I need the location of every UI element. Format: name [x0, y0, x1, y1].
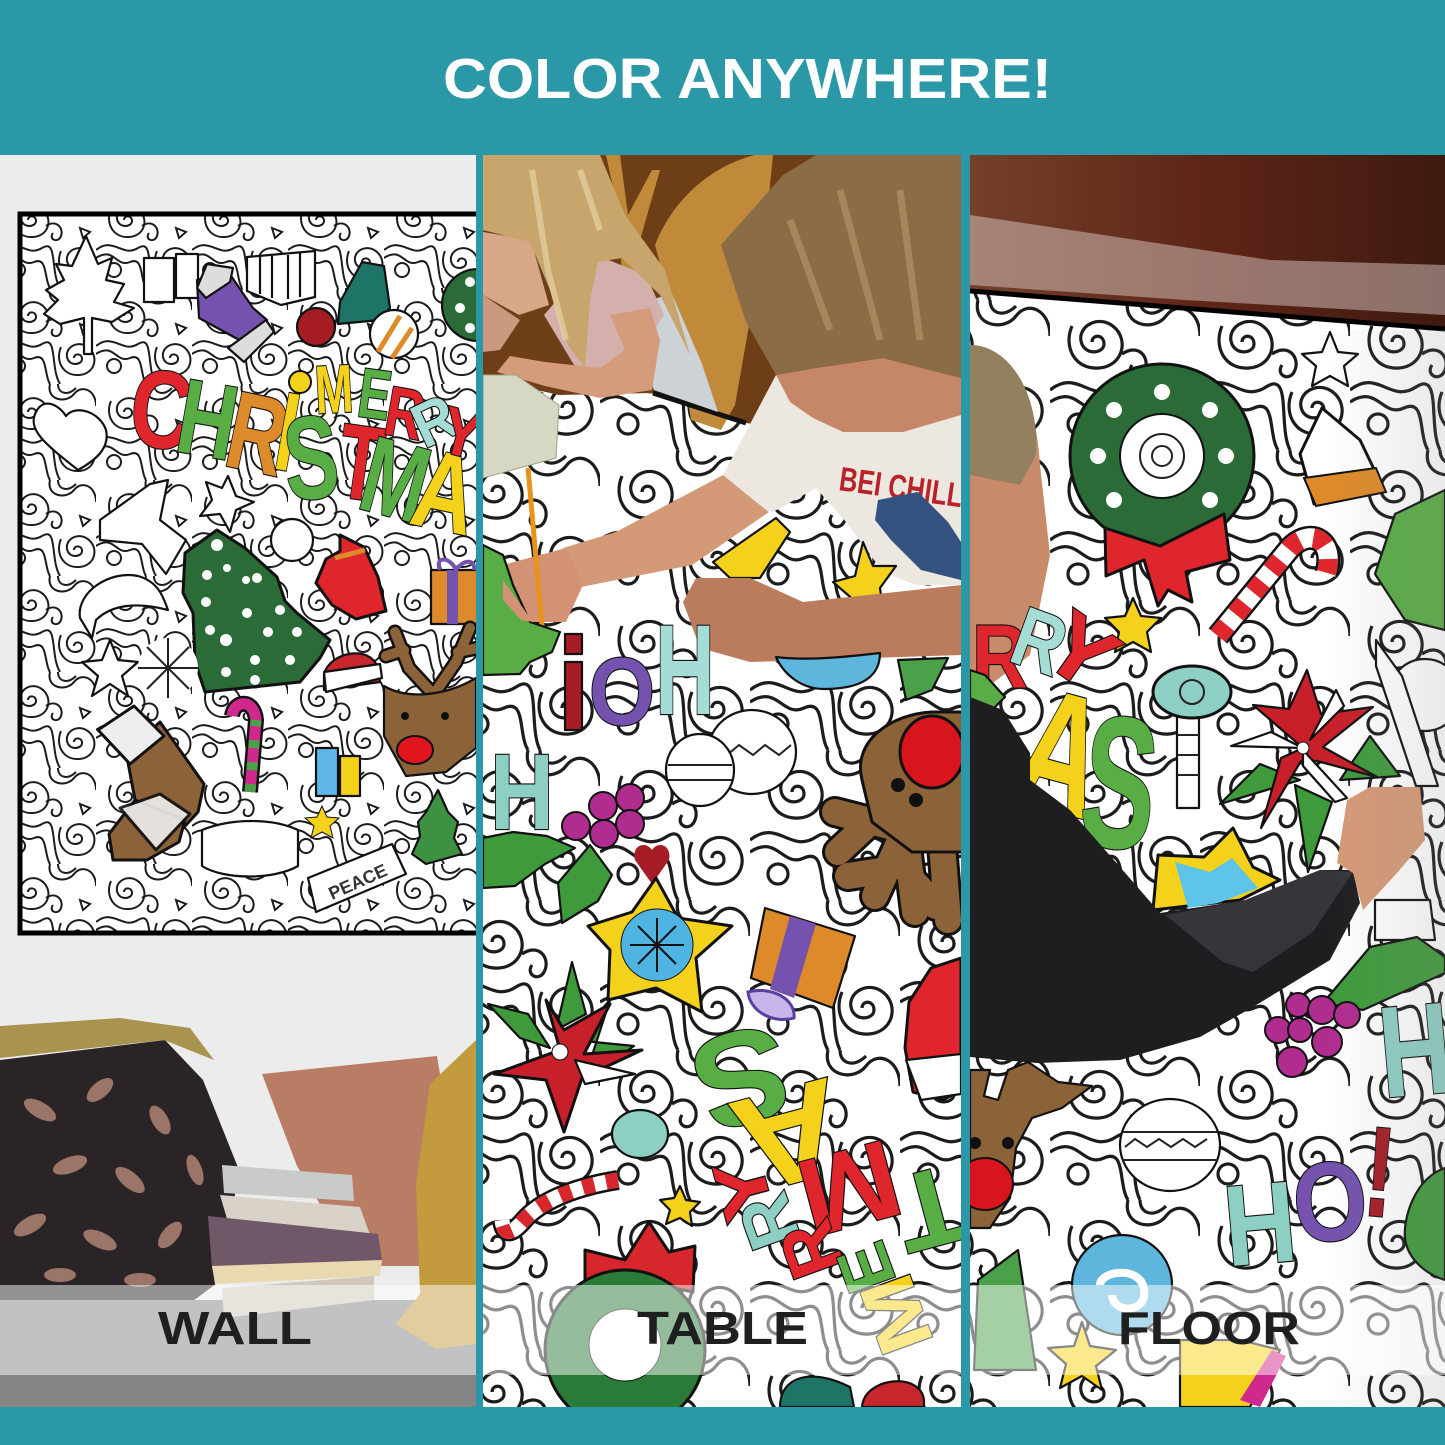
- tree outline doodle: [44, 236, 134, 354]
- yellow star: [1048, 1322, 1116, 1390]
- small green tree: [898, 658, 948, 700]
- bottom green ornament: [780, 1377, 854, 1407]
- red mitten: [316, 535, 386, 619]
- holly: [483, 832, 612, 923]
- upside down Merry Christmas lettering: Y: [697, 1150, 789, 1230]
- reindeer upside down: [835, 712, 972, 920]
- Merry Christmas lettering: A: [996, 650, 1126, 856]
- berries: [562, 784, 644, 848]
- Merry Christmas lettering: S: [1072, 674, 1167, 891]
- title: COLOR ANYWHERE!: [443, 47, 1052, 111]
- label strip: wall: [0, 1285, 476, 1375]
- HO! lettering: !: [1359, 1100, 1401, 1245]
- upside down Merry Christmas lettering: A: [717, 1048, 862, 1224]
- green bag: [338, 262, 390, 324]
- heart: [634, 845, 669, 884]
- gingerbread heart: [34, 404, 107, 470]
- label strip: table: [483, 1285, 961, 1375]
- green blob: [483, 545, 560, 675]
- blue swirl: [1072, 1235, 1172, 1335]
- blue ornament: [776, 653, 880, 689]
- star doodles: [82, 476, 254, 696]
- poster edge: [970, 291, 1445, 329]
- Merry Christmas lettering: [970, 588, 1167, 891]
- HO! lettering: H: [1219, 1157, 1302, 1291]
- shirt print: BEI CHILL: [837, 460, 965, 515]
- Christmas lettering: Y: [433, 392, 491, 474]
- upside down Merry Christmas lettering: [677, 995, 981, 1366]
- green ornament right: [1375, 490, 1445, 630]
- Christmas lettering: C: [126, 346, 198, 474]
- reindeer: [957, 1062, 1092, 1228]
- label text: TABLE: [637, 1302, 808, 1354]
- star: [1105, 598, 1161, 652]
- stack of books: [208, 1165, 382, 1318]
- other forearm: [683, 578, 961, 662]
- santa hat doodle: [80, 575, 168, 638]
- poster edge: [653, 393, 746, 423]
- right side shade: [970, 330, 1445, 1407]
- brown mittens: [98, 706, 204, 860]
- wreath edge: [440, 268, 476, 342]
- hair highlight: [532, 170, 600, 340]
- candy cane: [1218, 538, 1328, 636]
- upside down Merry Christmas lettering: S: [677, 995, 806, 1161]
- Christmas lettering: T: [331, 402, 391, 525]
- poster surface: [483, 391, 961, 1407]
- peace banner: [308, 844, 406, 912]
- yellow chair: [396, 1040, 476, 1349]
- teal divider right: [961, 155, 970, 1407]
- small star: [305, 806, 339, 838]
- Merry Christmas lettering: R: [1000, 588, 1079, 694]
- light strip on floor: [970, 215, 1445, 315]
- purple sock: [197, 264, 274, 362]
- Merry Christmas lettering: R: [972, 607, 1028, 707]
- HO lettering: [490, 599, 715, 852]
- crate: [483, 375, 559, 478]
- Christmas lettering: I: [267, 369, 308, 495]
- label strip: floor: [970, 1285, 1445, 1375]
- panel: wall: [0, 155, 514, 1407]
- gift: [748, 908, 855, 1020]
- white ornament right: [1389, 659, 1445, 731]
- HO lettering: H: [490, 731, 554, 852]
- small star: [660, 1186, 700, 1226]
- panel: table: [483, 155, 981, 1430]
- star doodle: [1302, 332, 1358, 386]
- basket leaf print: [10, 1074, 207, 1287]
- upside down Merry Christmas lettering: M: [843, 1263, 950, 1366]
- wreath: [545, 1270, 705, 1430]
- bottom band: [0, 1407, 1445, 1445]
- wreath: [1070, 364, 1254, 548]
- green ornament bottom: [1405, 1168, 1445, 1280]
- upside down Merry Christmas lettering: R: [723, 1183, 816, 1259]
- snowflake doodle: [138, 638, 198, 698]
- berries: [1265, 993, 1360, 1077]
- striped ornaments: [297, 308, 418, 358]
- candles: [144, 254, 198, 302]
- HO! lettering: [1219, 1100, 1401, 1291]
- gift: [431, 560, 481, 624]
- small tree: [974, 1250, 1036, 1370]
- yellow gift: [713, 518, 790, 578]
- yellow star: [1153, 828, 1280, 910]
- poster on wall: [20, 214, 514, 933]
- Christmas lettering: A: [402, 424, 489, 559]
- holly doodle: [100, 480, 186, 574]
- girl: [483, 155, 718, 412]
- label text: FLOOR: [1118, 1302, 1300, 1354]
- sleeve fold highlight: [1165, 870, 1353, 972]
- firecracker: [1376, 640, 1438, 786]
- boy hair: [721, 155, 961, 378]
- reindeer: [384, 628, 478, 776]
- Christmas lettering: R: [379, 371, 430, 455]
- Christmas lettering: H: [169, 357, 246, 483]
- floor: [0, 1300, 476, 1407]
- wooden floor: [970, 155, 1445, 327]
- chairs: [606, 155, 773, 430]
- bell: [1300, 408, 1386, 506]
- Christmas lettering: R: [401, 382, 468, 462]
- boy arm: [563, 475, 769, 588]
- upside down Merry Christmas lettering: M: [785, 1116, 914, 1260]
- teal swirl: [612, 1110, 668, 1158]
- Christmas lettering: R: [216, 368, 299, 500]
- Christmas lettering: [133, 364, 476, 536]
- hand over blob: [503, 580, 533, 622]
- pillow: [262, 1056, 447, 1266]
- poster surface: [970, 155, 1445, 1407]
- teal swirl lollipop: [1153, 666, 1231, 808]
- Christmas lettering: M: [349, 413, 442, 546]
- boy face: [776, 358, 961, 432]
- wall background: [0, 155, 476, 1407]
- teal divider left: [476, 155, 483, 1407]
- ornaments: [666, 710, 796, 806]
- striped cone under hand: [1375, 900, 1435, 940]
- Christmas lettering: S: [279, 390, 344, 527]
- boy t-shirt: [723, 375, 961, 585]
- small red hat: [862, 1381, 924, 1407]
- candy cane: [502, 1180, 618, 1231]
- boy: [503, 155, 965, 662]
- yellow star: [833, 542, 896, 602]
- ornament doodle: [271, 519, 313, 561]
- lower-left skin patch: [483, 295, 520, 352]
- panel: floor: [957, 155, 1445, 1407]
- man's sleeve: [970, 697, 1360, 1063]
- red bow: [1105, 514, 1230, 606]
- ornament: [1120, 1099, 1220, 1191]
- HO lettering: H: [655, 599, 715, 742]
- upside down Merry Christmas lettering: T: [882, 1140, 981, 1276]
- HO lettering: O: [589, 639, 655, 746]
- basket: [0, 1040, 239, 1310]
- arm: [497, 308, 660, 398]
- upside down Merry Christmas lettering: R: [763, 1209, 861, 1289]
- small tree: [412, 790, 462, 864]
- label text: WALL: [158, 1302, 312, 1354]
- Christmas lettering: M: [313, 351, 355, 428]
- pencil: [528, 468, 543, 638]
- Merry Christmas lettering: Y: [1025, 592, 1136, 712]
- red hat: [324, 653, 382, 692]
- gift outline doodle: [247, 251, 315, 305]
- pink shirt: [544, 255, 664, 375]
- candy cane: [232, 704, 256, 792]
- star ornament: [588, 878, 732, 1012]
- room behind: [483, 155, 961, 430]
- face: [483, 232, 549, 315]
- shark print: [875, 492, 961, 580]
- sock: [1180, 1340, 1280, 1407]
- man's hand: [1337, 787, 1425, 910]
- HO! lettering: O: [1288, 1136, 1372, 1267]
- peace banner: PEACE: [325, 860, 390, 904]
- poinsettia: [1220, 670, 1400, 872]
- pink stripe: [1240, 1350, 1286, 1407]
- poinsettia: [488, 962, 642, 1132]
- blanket: [0, 1018, 214, 1060]
- red bow: [585, 1222, 695, 1294]
- candles: [316, 748, 360, 796]
- red mitten: [905, 958, 961, 1100]
- green Christmas tree: [183, 530, 330, 692]
- hat box gift: [202, 821, 298, 876]
- holly: [1323, 937, 1445, 1010]
- upside down Merry Christmas lettering: E: [822, 1233, 911, 1303]
- drawing hand: [503, 548, 583, 622]
- hair: [483, 155, 690, 368]
- man's head: [970, 345, 1050, 700]
- header band: [0, 0, 1445, 155]
- striped skirt: [642, 294, 718, 412]
- Christmas lettering: E: [354, 353, 396, 435]
